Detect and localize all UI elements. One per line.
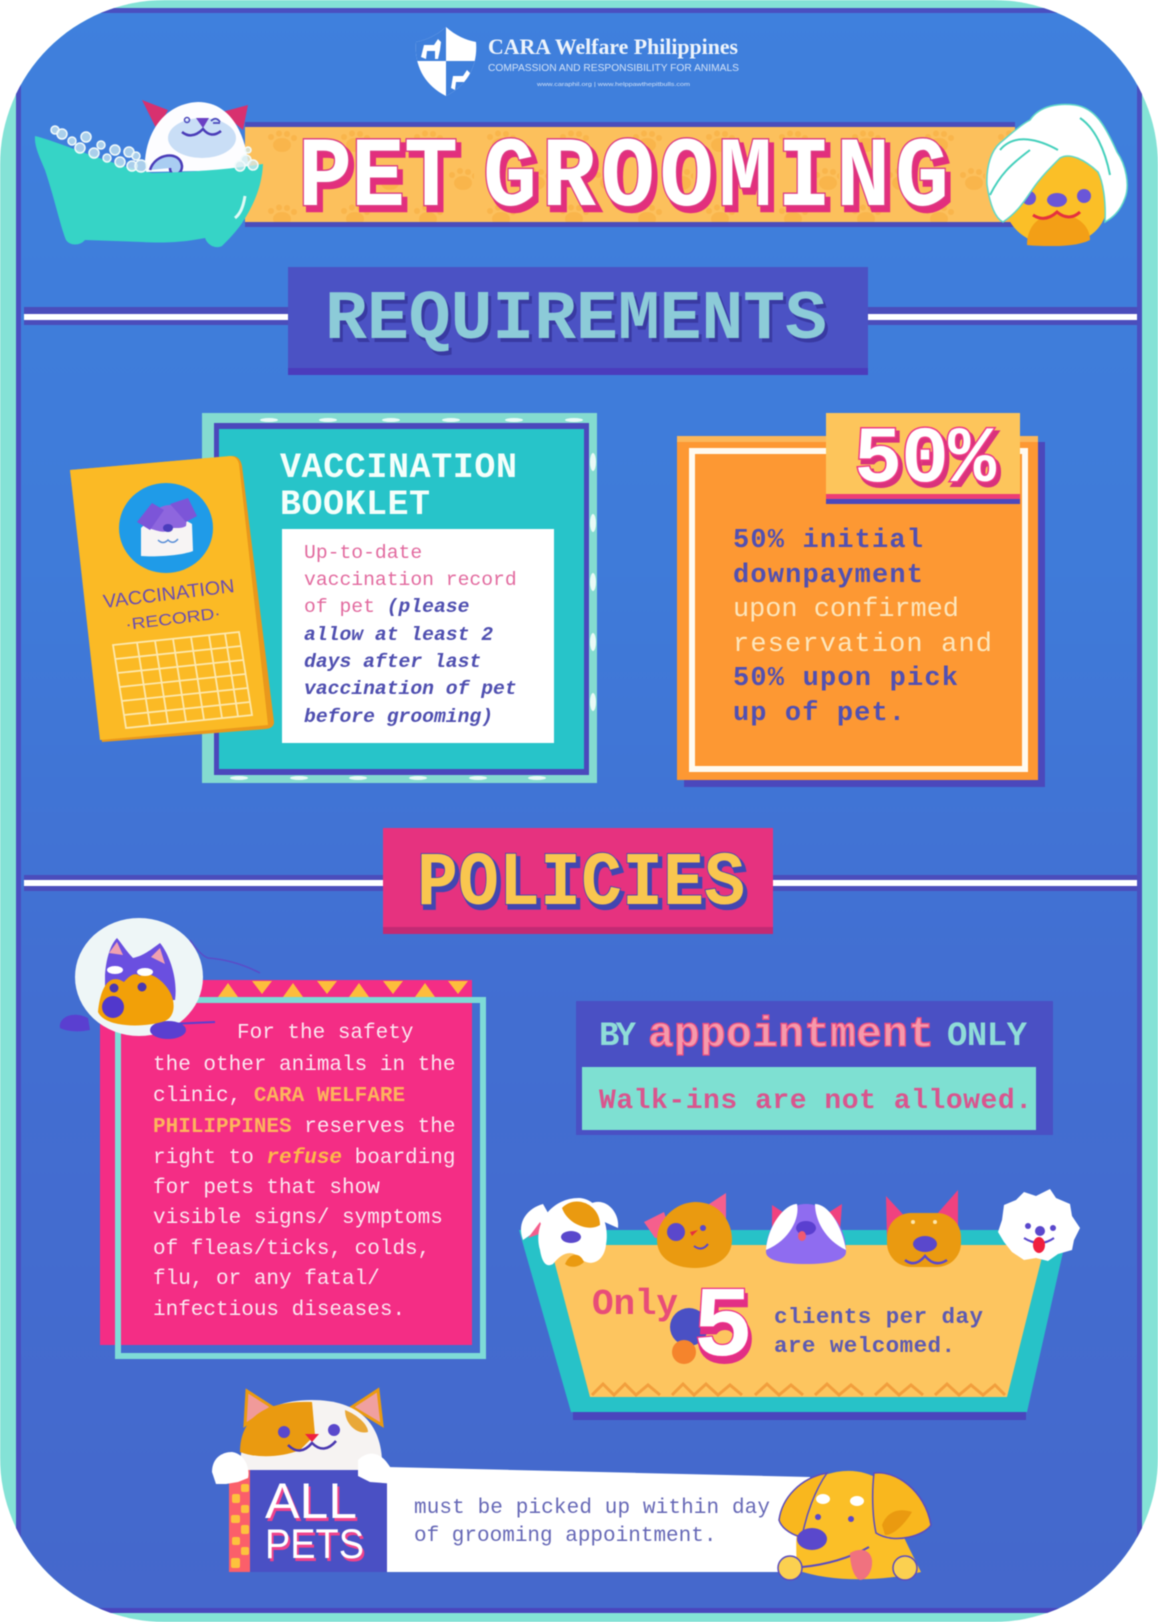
illustration: cat in bathtub [35, 100, 263, 247]
illustration: golden dog [778, 1471, 931, 1580]
text: safety policy: right to refuse boarding [153, 1147, 455, 1170]
zigzag trim [592, 1384, 1005, 1395]
icon: shield [414, 25, 478, 98]
text: all pets: ALL [267, 1476, 359, 1532]
text: safety policy: PHILIPPINES reserves the [153, 1116, 455, 1139]
towel [987, 104, 1127, 222]
icon: dog badge [119, 483, 213, 573]
heading: requirements: REQUIREMENTS [325, 281, 827, 360]
logo: CARA Welfare Philippines: CARA Welfare Philippines [488, 34, 738, 59]
text: pick-up rule: of grooming appointment. [414, 1525, 716, 1548]
bubbles [51, 126, 258, 172]
illustration: dog with towel [987, 104, 1127, 246]
illustration: orange cat [644, 1193, 732, 1268]
badge: 50% [826, 413, 1020, 510]
text: safety policy: visible signs/ symptoms [153, 1207, 443, 1230]
text: downpayment terms: 50% initial [733, 526, 923, 556]
text: clients per day: clients per day [774, 1304, 983, 1330]
text: by appointment only: appointment [648, 1010, 934, 1059]
heading: policies [383, 828, 773, 934]
title banner [245, 122, 1015, 240]
text: vaccination record: ·RECORD· [124, 605, 222, 634]
text box: vaccination note: vaccination of pet [304, 678, 517, 700]
number: 5: 5 [693, 1273, 753, 1386]
text: safety policy: infectious diseases. [153, 1299, 405, 1322]
text box: vaccination note: before grooming) [304, 706, 493, 728]
panel: five clients basket [519, 1230, 1068, 1420]
illustration: corgi [886, 1190, 961, 1267]
record grid [113, 632, 252, 728]
text box: vaccination note: of pet (please [304, 596, 469, 618]
text: walk-ins: Walk-ins are not allowed. [599, 1086, 1032, 1117]
panel: vaccination booklet [202, 413, 597, 783]
icon: balls [670, 1308, 708, 1364]
text: only: Only [592, 1284, 678, 1325]
number: 5: 5 [695, 1279, 755, 1392]
text: all pets: PETS [267, 1523, 366, 1570]
panel: safety policy [100, 980, 483, 1356]
heading: requirements: REQUIREMENTS [328, 285, 830, 364]
logo: CARA Welfare Philippines [414, 25, 739, 98]
title: PET GROOMING: GROOMING [483, 123, 949, 235]
text: downpayment terms: downpayment [733, 561, 923, 591]
panel: by appointment only [576, 1001, 1053, 1135]
illustration: dog in cone [60, 918, 260, 1039]
logo: CARA Welfare Philippines: COMPASSION AND RESPONSIBILITY FOR ANIMALS [488, 63, 739, 74]
text: all pets: ALL [265, 1473, 357, 1529]
text: safety policy: the other animals in the [153, 1054, 455, 1077]
text: pick-up rule [414, 1497, 770, 1548]
illustration: purple cat [766, 1204, 846, 1264]
text: safety policy: clinic, CARA WELFARE [153, 1085, 405, 1108]
text: downpayment terms: 50% upon pick [733, 664, 958, 694]
heading: policies: POLICIES [420, 845, 748, 931]
text: safety policy: of fleas/ticks, colds, [153, 1238, 430, 1261]
text: safety policy [153, 1022, 455, 1322]
heading: vaccination booklet [280, 448, 517, 525]
panel: all pets [229, 1467, 810, 1572]
text: safety policy: for pets that show [153, 1177, 380, 1200]
text: downpayment terms: up of pet. [733, 699, 905, 729]
badge: 50%: 50% [857, 419, 1000, 510]
badge: 50%: 50% [854, 415, 997, 506]
text box: vaccination note: Up-to-date [304, 542, 422, 564]
text: vaccination record [102, 576, 236, 634]
decorative dots [230, 418, 596, 780]
text box: vaccination note: allow at least 2 [304, 624, 493, 646]
text box: vaccination note: vaccination record [304, 569, 517, 591]
text: downpayment terms [733, 526, 992, 729]
bathtub [35, 136, 263, 247]
heading: vaccination booklet: VACCINATION [280, 448, 517, 488]
text: by appointment only: BY [599, 1018, 637, 1056]
heading: vaccination booklet: BOOKLET [280, 485, 430, 525]
text: safety policy: For the safety [237, 1022, 413, 1045]
text: clients per day: are welcomed. [774, 1333, 955, 1359]
title: PET GROOMING: GROOMING [487, 128, 953, 240]
text: by appointment only: ONLY [947, 1018, 1028, 1056]
text: clients per day [774, 1304, 983, 1359]
pattern strip [229, 1470, 251, 1572]
illustration: vaccination record booklet [70, 456, 274, 742]
text: by appointment only [599, 1010, 1028, 1059]
text: vaccination record: VACCINATION [102, 576, 236, 613]
illustration: calico cat [212, 1390, 397, 1484]
title: PET GROOMING [298, 123, 953, 240]
text: downpayment terms: reservation and [733, 630, 992, 660]
divider lines: policies [24, 875, 1137, 891]
text: safety policy: flu, or any fatal/ [153, 1268, 380, 1291]
divider lines: requirements [24, 307, 1137, 325]
logo: CARA Welfare Philippines: www.caraphil.org | www.helppawthepitbulls.com [536, 82, 691, 88]
text box: vaccination note [282, 529, 554, 743]
title: PET GROOMING: PET [298, 123, 458, 235]
heading: requirements [288, 267, 868, 375]
text: all pets [265, 1473, 366, 1570]
text: all pets: PETS [265, 1520, 364, 1567]
title: PET GROOMING: PET [302, 128, 462, 240]
cat [142, 100, 249, 175]
illustration: fluffy white dog [998, 1189, 1080, 1261]
text: pick-up rule: must be picked up within day [414, 1497, 770, 1520]
heading: policies: POLICIES [417, 841, 745, 927]
illustration: spotted dog [521, 1198, 618, 1267]
text: downpayment terms: upon confirmed [733, 595, 959, 625]
white message banner [387, 1467, 810, 1572]
text box: vaccination note: days after last [304, 651, 481, 673]
panel: 50% downpayment [677, 413, 1045, 787]
triangle band [218, 981, 468, 997]
